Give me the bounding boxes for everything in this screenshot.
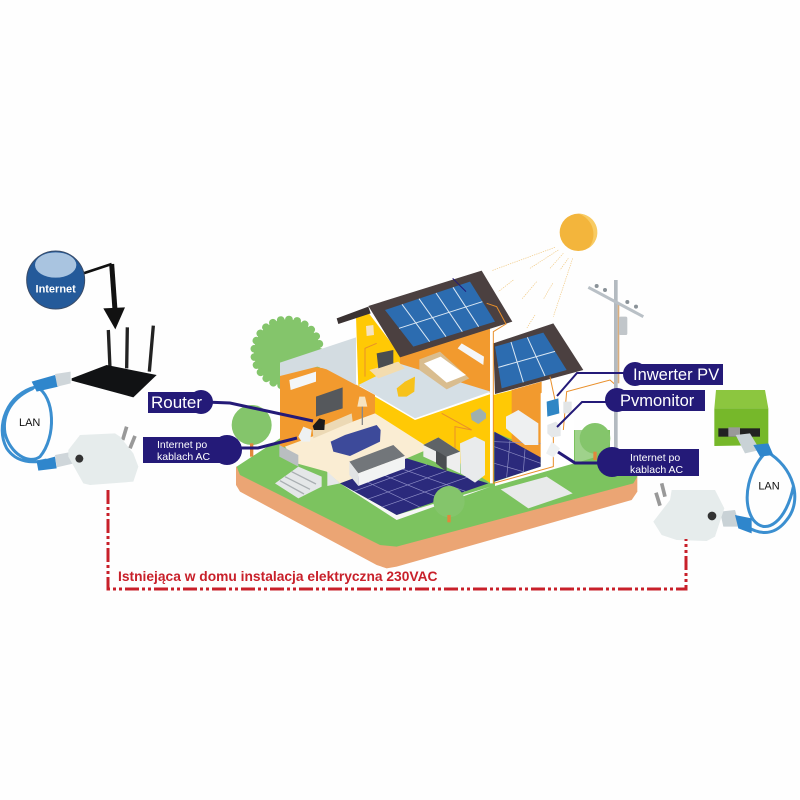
upper floor orange wall (400, 328, 491, 393)
label: Internet po kablach AC left: kablach AC (157, 451, 211, 463)
label: Router (148, 390, 213, 414)
orange wiring (365, 303, 616, 483)
label: Internet po kablach AC right (597, 447, 699, 477)
LAN cable left (2, 372, 74, 471)
LAN cable right (720, 433, 795, 533)
entry steps (275, 467, 322, 498)
small router in living room (313, 418, 325, 430)
thick connector lines (205, 402, 600, 463)
sun rays (492, 247, 573, 328)
tree left (232, 405, 272, 457)
arrow down to router (103, 264, 125, 329)
island soil (236, 467, 637, 568)
right room tiled floor (494, 432, 541, 482)
icon: internet globe (27, 251, 85, 309)
main roof (337, 271, 512, 357)
entry landing (279, 445, 298, 467)
upper bed (419, 352, 469, 389)
left equipment (2, 251, 157, 485)
kitchen island (349, 445, 405, 486)
kitchen cabinets and oven (423, 437, 460, 473)
label: Inwerter PV: Inwerter PV (633, 366, 719, 384)
front tree (433, 486, 465, 522)
television (313, 387, 353, 438)
air conditioner left (289, 372, 316, 390)
house illustration (232, 214, 643, 568)
refrigerator (460, 437, 485, 483)
upper floor yellow wall (356, 313, 402, 387)
label: Internet po kablach AC right: kablach AC (630, 464, 684, 476)
yellow chair (397, 377, 415, 397)
inverter device (547, 398, 572, 417)
kitchen side block (327, 472, 340, 486)
label: Internet po kablach AC left (143, 435, 242, 465)
red dash-dot electrical line (108, 490, 686, 589)
island grass (237, 430, 637, 547)
electrical installation caption: Istniejąca w domu instalacja elektryczna 230VAC (118, 569, 438, 584)
living room floor (285, 413, 430, 483)
upper floor slab (358, 364, 491, 418)
sun (560, 214, 597, 251)
powerline adapter left (68, 427, 138, 485)
right equipment (653, 390, 795, 541)
desk and monitor (369, 350, 405, 378)
electrical panel (471, 408, 486, 424)
kitchen tiled floor (340, 458, 491, 520)
main solar panel (385, 282, 495, 347)
label: Inwerter PV (623, 362, 723, 386)
pvmonitor device (547, 422, 561, 437)
right room wall orange (512, 382, 542, 458)
left roof slab (280, 337, 356, 385)
LAN label left: LAN (19, 417, 40, 429)
small powerline adapter house right (546, 442, 560, 457)
washing machines (506, 410, 538, 445)
second roof (493, 323, 583, 394)
icon: router (72, 326, 157, 397)
LAN label right: LAN (758, 481, 780, 493)
utility pole (588, 280, 643, 453)
internet link line (83, 264, 112, 273)
label: Internet po kablach AC left: Internet po (157, 439, 207, 451)
powerline adapter right (653, 483, 724, 541)
label: Router: Router (151, 393, 202, 412)
green pvmonitor box (714, 390, 768, 446)
tree right (575, 423, 610, 463)
second solar panel (495, 333, 567, 388)
front sidewalk (501, 477, 573, 508)
left ground floor wall (280, 363, 375, 448)
label: Internet po kablach AC right: Internet po (630, 452, 680, 464)
upper air conditioner (458, 343, 484, 365)
label: Pvmonitor (605, 388, 705, 412)
wall edge (490, 328, 493, 483)
wall lamp (366, 325, 374, 336)
small powerline adapter house left (298, 427, 312, 442)
tree behind house (254, 319, 321, 386)
sofa (331, 425, 381, 456)
floor lamp (357, 397, 367, 425)
thin connector lines (557, 373, 633, 427)
right room wall yellow (493, 390, 513, 440)
icon: internet globe: Internet (36, 284, 76, 296)
white outer wall (495, 373, 574, 486)
label: Pvmonitor: Pvmonitor (620, 392, 695, 410)
lower floor back wall (375, 394, 491, 483)
